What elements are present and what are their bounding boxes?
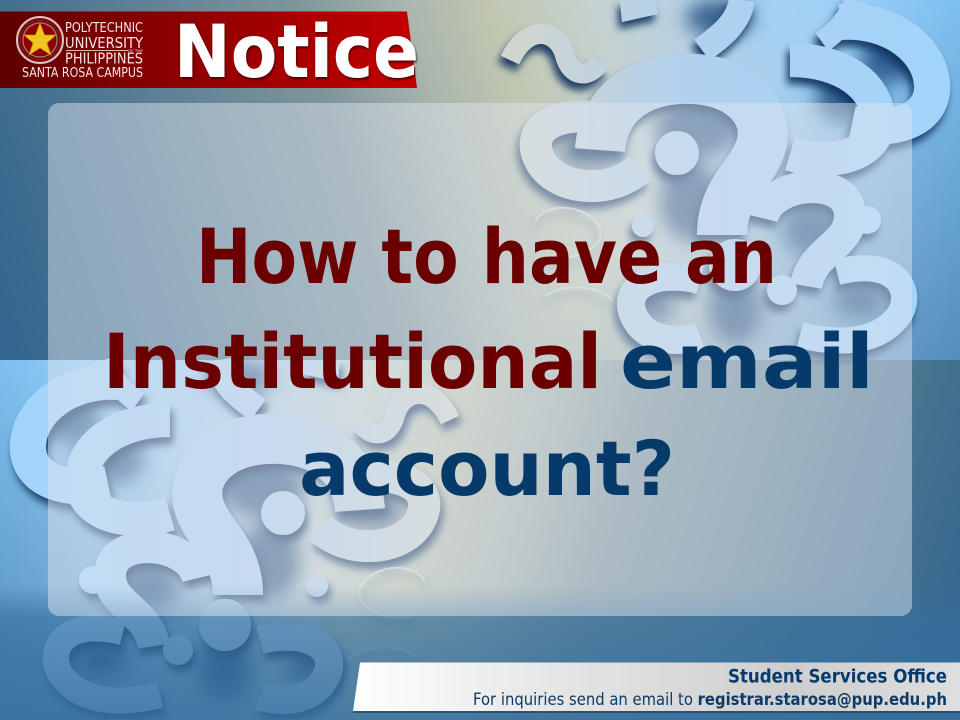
university name: UNIVERSITY [65, 34, 144, 52]
heading: Notice: Notice [174, 10, 419, 95]
header banner [0, 10, 419, 95]
title line 3: account? [299, 424, 675, 513]
main title [103, 212, 874, 513]
title line 1: How to have an [196, 212, 777, 301]
university name: POLYTECHNIC [65, 21, 143, 36]
title line 2: email [620, 317, 874, 406]
footer bar [353, 662, 960, 713]
title line 2: Institutional [103, 317, 602, 406]
university name: PHILIPPINES [65, 50, 143, 68]
title line 2 [103, 317, 874, 406]
red banner shape [0, 12, 417, 88]
footer shape [353, 663, 960, 713]
logo seal [17, 17, 63, 63]
question marks: upper right cluster [510, 0, 932, 344]
university name [22, 21, 144, 81]
university name: OF THE [128, 49, 144, 53]
university name: SANTA ROSA CAMPUS [22, 66, 143, 81]
translucent content panel [48, 103, 912, 616]
question marks: lower left cluster [28, 360, 450, 704]
